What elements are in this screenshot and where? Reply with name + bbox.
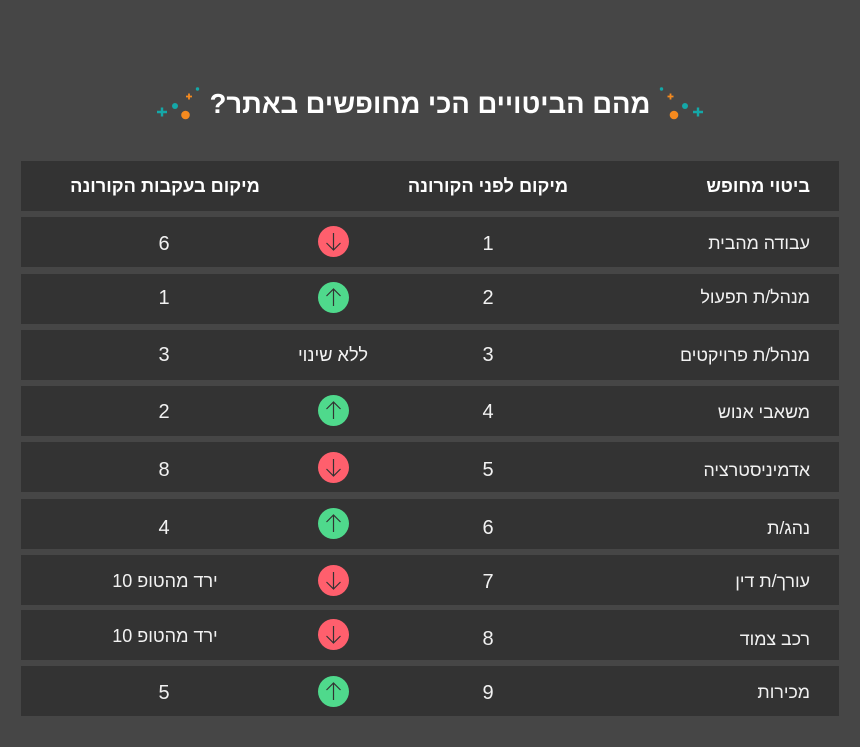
- row 6: 6: [482, 517, 494, 539]
- icon: right sparkles: [660, 87, 703, 120]
- row 9: [21, 666, 839, 716]
- row 2: [21, 274, 839, 324]
- row 6: נהג/ת: [767, 518, 810, 538]
- row 8: [21, 610, 839, 660]
- row 6: 4: [158, 517, 170, 539]
- row 3: 3: [482, 344, 494, 366]
- icon: green up arrow: [318, 676, 349, 707]
- row 1: עבודה מהבית: [708, 233, 810, 253]
- row 5: 5: [482, 459, 494, 481]
- title: מהם הביטויים הכי מחופשים באתר?: [210, 88, 650, 119]
- row 1: [21, 217, 839, 267]
- icon: green up arrow: [318, 282, 349, 313]
- heading: common term: ביטוי מחופש: [706, 176, 810, 196]
- row 2: 2: [482, 287, 494, 309]
- row 8: רכב צמוד: [740, 629, 810, 649]
- table header row: [21, 161, 839, 211]
- row 4: משאבי אנוש: [718, 402, 810, 422]
- icon: red down arrow: [318, 226, 349, 257]
- row 7: עורך/ת דין: [735, 571, 810, 591]
- row 9: מכירות: [757, 682, 810, 702]
- row 3: מנהל/ת פרויקטים: [680, 345, 810, 365]
- row 5: 8: [158, 459, 170, 481]
- row 7: [21, 555, 839, 605]
- icon: red down arrow: [318, 565, 349, 596]
- icon: green up arrow: [318, 508, 349, 539]
- row 8: 8: [482, 628, 494, 650]
- row 4: [21, 386, 839, 436]
- row 7: 7: [482, 571, 494, 593]
- row 3: 3: [158, 344, 170, 366]
- row 4: 4: [482, 401, 494, 423]
- row 8: ירד מהטופ 10: [112, 626, 218, 646]
- row 2: 1: [158, 287, 170, 309]
- row 5: [21, 442, 839, 492]
- icon: green up arrow: [318, 395, 349, 426]
- row 9: 5: [158, 682, 170, 704]
- row 6: [21, 499, 839, 549]
- row 5: אדמיניסטרציה: [704, 460, 810, 480]
- row 1: 1: [482, 233, 494, 255]
- row 3: [21, 330, 839, 380]
- heading: rank after corona: מיקום בעקבות הקורונה: [70, 176, 260, 196]
- row 4: 2: [158, 401, 170, 423]
- row 9: 9: [482, 682, 494, 704]
- row 1: 6: [158, 233, 170, 255]
- text: no change: ללא שינוי: [298, 345, 368, 365]
- row 2: מנהל/ת תפעול: [700, 287, 810, 307]
- heading: rank before corona: מיקום לפני הקורונה: [408, 176, 568, 196]
- row 7: ירד מהטופ 10: [112, 571, 218, 591]
- icon: left sparkles: [157, 87, 200, 120]
- icon: red down arrow: [318, 619, 349, 650]
- icon: red down arrow: [318, 452, 349, 483]
